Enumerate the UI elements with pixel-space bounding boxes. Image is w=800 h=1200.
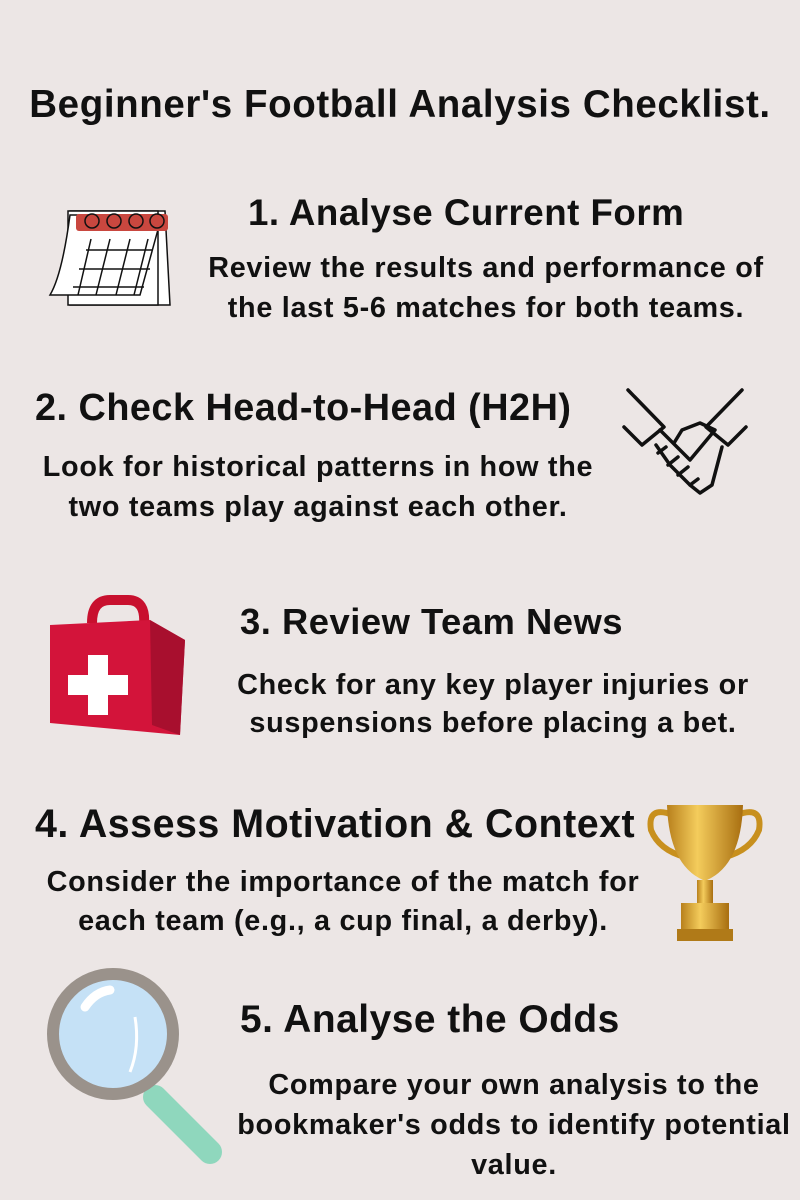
icon: trophy (647, 805, 762, 941)
text 2: Look for historical patterns in how the (43, 451, 593, 483)
text 3: suspensions before placing a bet. (249, 707, 737, 739)
title: Beginner's Football Analysis Checklist. (29, 83, 771, 126)
text 5: Compare your own analysis to the (268, 1069, 760, 1101)
text 5: bookmaker's odds to identify potential (237, 1109, 791, 1141)
text 4 (47, 866, 639, 937)
heading 3: 3. Review Team News (240, 601, 623, 642)
icon: first aid kit (50, 595, 185, 735)
heading 5: 5. Analyse the Odds (240, 998, 620, 1041)
heading 4: 4. Assess Motivation & Context (35, 802, 635, 846)
text 2 (43, 451, 593, 523)
text 5: value. (471, 1149, 557, 1181)
text 3: Check for any key player injuries or (237, 669, 749, 701)
text 1 (208, 252, 764, 324)
heading 1: 1. Analyse Current Form (248, 192, 684, 233)
text 4: Consider the importance of the match for (47, 866, 639, 898)
icon: calendar (48, 210, 171, 306)
text 3 (237, 669, 749, 739)
text 2: two teams play against each other. (68, 491, 568, 523)
icon: handshake (622, 388, 748, 495)
heading 2: 2. Check Head-to-Head (H2H) (35, 387, 571, 429)
text 1: the last 5-6 matches for both teams. (228, 292, 744, 324)
icon: magnifying glass (47, 968, 222, 1164)
text 5 (237, 1069, 791, 1181)
text 4: each team (e.g., a cup final, a derby). (78, 905, 608, 937)
text 1: Review the results and performance of (208, 252, 764, 284)
